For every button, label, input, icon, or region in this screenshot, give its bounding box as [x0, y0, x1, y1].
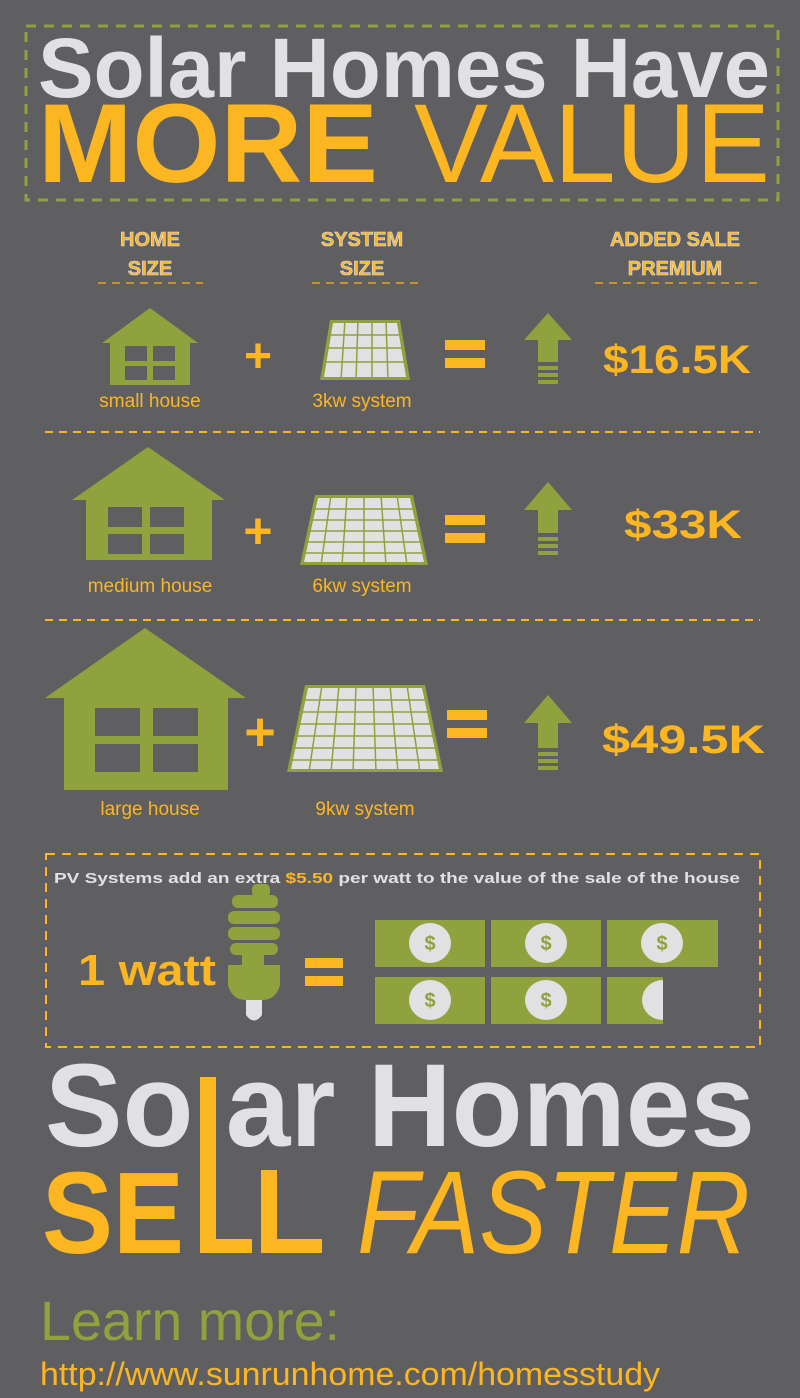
- icon: 9kw panel: [287, 685, 443, 772]
- row 1: 3kw system: [312, 391, 412, 412]
- icon: arrow 1: [524, 313, 572, 384]
- column headers: HOME: [120, 229, 180, 251]
- row 3: +: [244, 702, 276, 762]
- icon: arrow 3: [524, 695, 572, 770]
- icon: money bills: $: [540, 933, 552, 955]
- heading: Solar Homes Sell Faster: Solar Homes: [45, 1040, 755, 1172]
- column headers: SIZE: [340, 258, 384, 280]
- heading: Solar Homes Sell Faster: SE: [42, 1148, 184, 1278]
- row 1: [99, 308, 751, 412]
- icon: bulb: [228, 884, 280, 1020]
- row 2: [72, 447, 742, 597]
- row 2: +: [243, 503, 273, 559]
- icon: arrow 2: [524, 482, 572, 555]
- column headers: SYSTEM: [321, 229, 403, 251]
- title line 1: Solar Homes Have: [38, 21, 770, 115]
- icon: 6kw panel: [300, 495, 428, 565]
- row 1: small house: [99, 391, 201, 412]
- caption: PV Systems add an extra $5.50 per watt to the value of the sale of the house: [54, 870, 740, 887]
- icon: money bills: [375, 920, 718, 1024]
- row 3: 9kw system: [315, 799, 415, 820]
- icon: 3kw panel: [320, 320, 410, 380]
- panel: per watt value: [46, 854, 760, 1047]
- row 1: $16.5K: [603, 338, 751, 382]
- title box: [26, 21, 778, 206]
- row 2: medium house: [88, 576, 212, 597]
- heading: Solar Homes Sell Faster: [42, 1040, 755, 1279]
- column headers: ADDED SALE: [610, 229, 740, 251]
- column headers: SIZE: [128, 258, 172, 280]
- url: http://www.sunrunhome.com/homesstudy: [40, 1356, 660, 1392]
- icon: large house: [45, 628, 246, 790]
- row 3: large house: [100, 799, 200, 820]
- icon: money bills: $: [540, 990, 552, 1012]
- title line 2: MORE: MORE: [38, 81, 378, 206]
- 1 watt: 1 watt: [78, 946, 216, 995]
- column headers: [120, 229, 740, 280]
- learn more: [40, 1289, 660, 1392]
- icon: money bills: $: [424, 933, 436, 955]
- icon: money bills: $: [424, 990, 436, 1012]
- row 2: $33K: [624, 503, 742, 547]
- row 1: +: [244, 330, 272, 383]
- learn more: Learn more:: [40, 1289, 340, 1352]
- title line 2: VALUE: VALUE: [414, 81, 770, 206]
- row 2: 6kw system: [312, 576, 412, 597]
- row 3: $49.5K: [602, 718, 765, 762]
- icon: small house: [102, 308, 198, 385]
- column headers: PREMIUM: [628, 258, 722, 280]
- icon: money bills: $: [656, 933, 668, 955]
- icon: medium house: [72, 447, 225, 560]
- row 3: [45, 628, 765, 820]
